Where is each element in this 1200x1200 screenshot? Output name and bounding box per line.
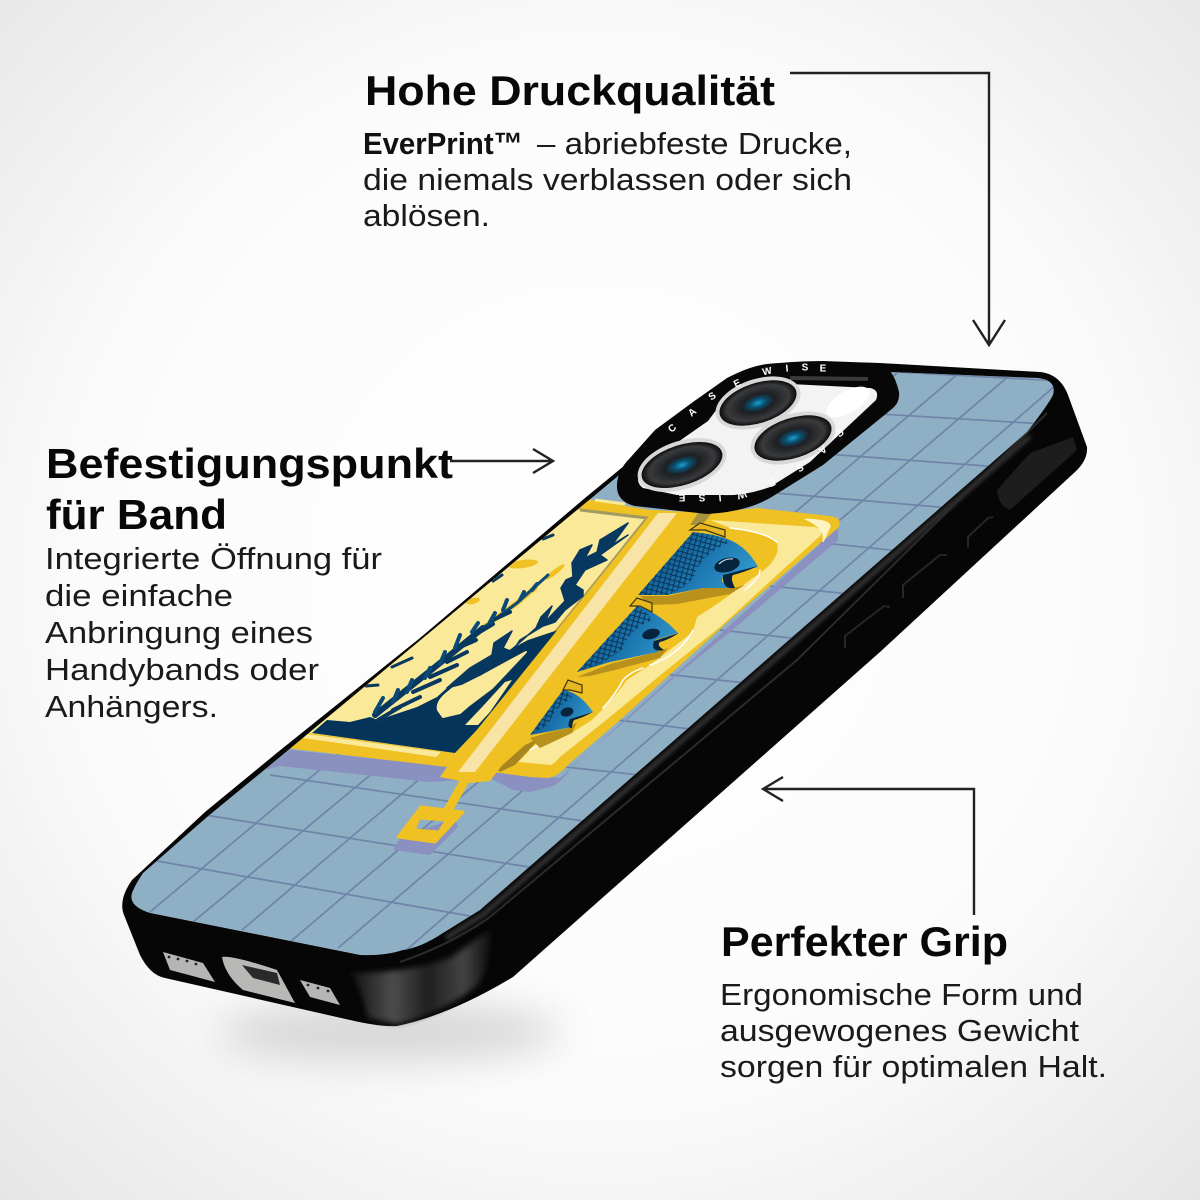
fish 2	[577, 598, 679, 672]
ring brand lettering: S	[793, 461, 805, 474]
fish 3	[530, 680, 593, 735]
description: Integrierte Öffnung für	[45, 541, 382, 576]
pale strip	[458, 513, 677, 772]
description: Anhängers.	[45, 689, 218, 724]
pull tab shadow	[393, 818, 458, 855]
glass window	[638, 383, 877, 495]
phone case	[100, 340, 1100, 1026]
description: Anbringung eines	[45, 615, 313, 650]
text block: grip	[720, 918, 1107, 1084]
port: usb	[222, 957, 295, 1003]
ring brand lettering: W	[735, 487, 748, 501]
ring cast shadow on strip	[690, 513, 712, 525]
back panel with artwork	[131, 372, 1054, 956]
small seaweed marks	[366, 535, 553, 686]
panel olive frame	[555, 508, 648, 631]
port: right speaker	[300, 980, 340, 1005]
pull tab ring	[398, 807, 463, 842]
pale cut-out blob right	[465, 680, 512, 725]
right pale area	[518, 520, 821, 765]
label shadow	[265, 528, 838, 792]
ring brand lettering: E	[766, 476, 777, 489]
flash glow	[822, 380, 874, 424]
ring brand lettering: S	[802, 362, 809, 374]
seaweed main branch	[447, 523, 628, 688]
feather lower leaves	[378, 612, 510, 720]
ring brand lettering: E	[678, 491, 685, 503]
text block: print quality	[363, 67, 852, 233]
blue surface	[131, 372, 1054, 956]
lens top	[709, 367, 807, 439]
port: left speaker	[163, 952, 215, 982]
heading: Befestigungspunkt	[46, 440, 453, 487]
lens left	[631, 428, 733, 502]
label corner gloss	[805, 519, 830, 542]
text block: strap attachment	[45, 440, 453, 724]
camera ring	[617, 361, 899, 514]
description: Ergonomische Form und	[720, 977, 1083, 1012]
case body	[122, 362, 1087, 1026]
description: ablösen.	[363, 198, 490, 233]
description: die einfache	[45, 578, 233, 613]
ring brand lettering	[666, 362, 846, 503]
yellow label	[265, 497, 840, 778]
arrow: grip	[763, 777, 974, 915]
fish 3 shadow	[530, 722, 577, 748]
ring brand lettering: C	[666, 422, 679, 435]
description: – abriebfeste Drucke,	[537, 126, 852, 161]
lens right	[744, 402, 842, 474]
grid lines	[150, 371, 1060, 953]
window inner rim	[790, 378, 868, 379]
description: sorgen für optimalen Halt.	[720, 1049, 1107, 1084]
pale cut-out blob	[438, 652, 526, 717]
pull tab stem	[447, 780, 465, 812]
feather stem accent	[483, 588, 535, 628]
heading: Perfekter Grip	[721, 918, 1008, 965]
ring brand lettering: E	[820, 364, 827, 374]
ring brand lettering: A	[816, 443, 829, 456]
corner highlight	[350, 928, 492, 1024]
description: EverPrint™	[363, 126, 523, 161]
ring frame	[617, 361, 899, 514]
description	[720, 977, 1107, 1084]
description	[45, 541, 382, 724]
ring brand lettering: A	[686, 406, 699, 419]
fish 2 shadow	[577, 648, 668, 677]
fish 1	[638, 523, 758, 595]
heading: Hohe Druckqualität	[365, 67, 775, 114]
description: Handybands oder	[45, 652, 319, 687]
side dark blob	[997, 437, 1077, 510]
yellow blotches	[466, 560, 564, 604]
description	[363, 126, 852, 233]
feather stem	[375, 628, 483, 715]
ring brand lettering: C	[833, 426, 846, 439]
label top rim highlight	[595, 500, 625, 504]
feather upper leaves	[375, 584, 537, 712]
feather stem tip	[483, 575, 548, 628]
ring brand lettering: I	[785, 363, 789, 375]
ring brand lettering: W	[761, 366, 774, 378]
seaweed feather	[375, 575, 548, 720]
pull strip	[440, 510, 696, 783]
label gloss highlights	[530, 528, 777, 750]
arrow: strap attachment	[450, 449, 553, 473]
description: ausgewogenes Gewicht	[720, 1013, 1079, 1048]
fish 1 shadow	[640, 585, 745, 605]
ring brand lettering: S	[698, 491, 705, 503]
left pale area	[295, 508, 645, 753]
side ridge line	[400, 413, 1047, 962]
arrow: print quality	[790, 73, 1005, 345]
side buttons	[845, 517, 993, 648]
phone shadow	[220, 1002, 560, 1062]
heading: für Band	[46, 491, 227, 538]
strip base shadow	[498, 741, 536, 772]
heading	[46, 440, 453, 538]
bottom left pale stripe	[303, 734, 441, 757]
ring brand lettering: I	[718, 491, 722, 503]
ring brand lettering: S	[707, 390, 719, 403]
description: die niemals verblassen oder sich	[363, 162, 852, 197]
navy seabed	[312, 630, 558, 753]
ring brand lettering: E	[732, 377, 743, 390]
bezel glow	[446, 436, 1030, 938]
